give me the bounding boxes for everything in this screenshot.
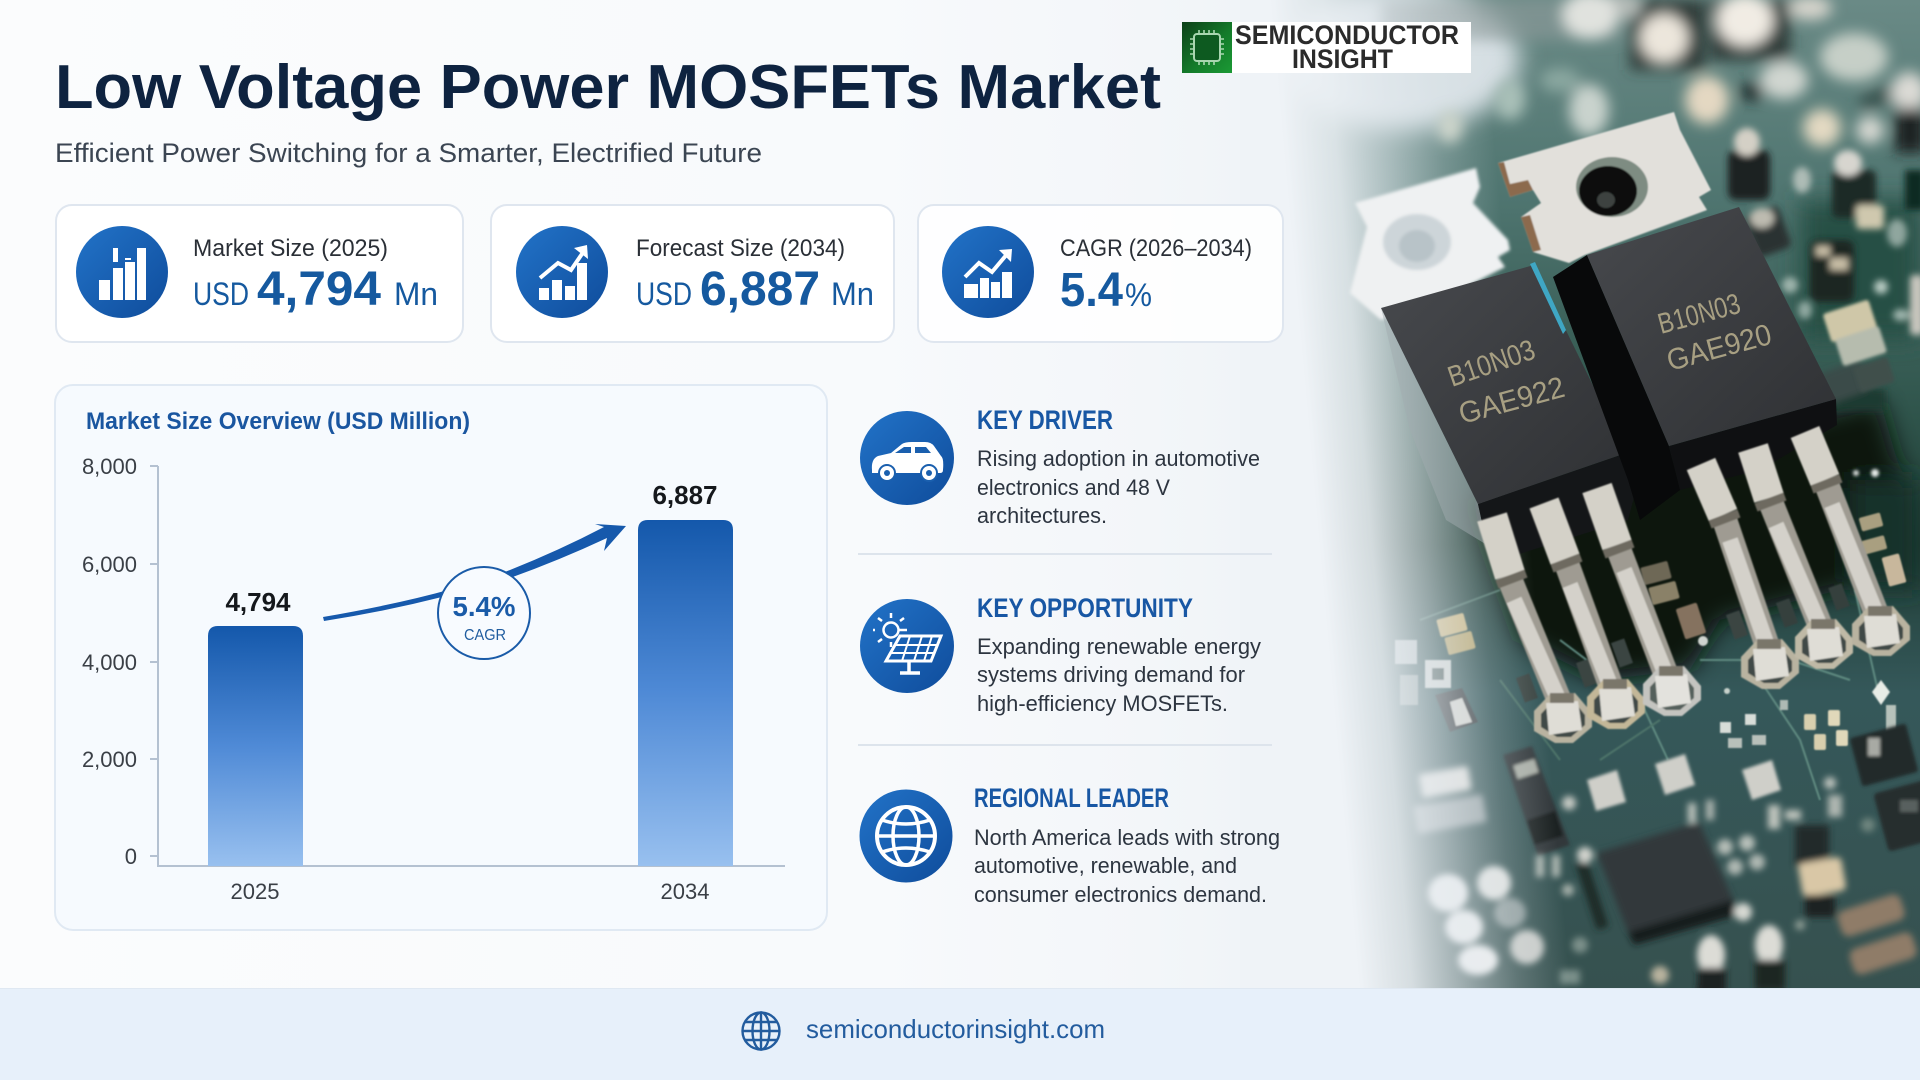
footer bar <box>0 988 1920 1080</box>
left body top face <box>1381 265 1626 504</box>
y axis labels: 4,000 <box>82 650 137 675</box>
description: consumer electronics demand. <box>974 882 1267 907</box>
description: systems driving demand for <box>977 662 1245 687</box>
cyan edge highlight <box>1530 262 1566 334</box>
callout: CAGR badge <box>438 567 530 659</box>
right body marking: B10N03 <box>1655 288 1744 341</box>
value: Mn <box>831 276 874 312</box>
circuit board base <box>1240 0 1920 990</box>
heading: KEY DRIVER <box>977 405 1113 435</box>
value: USD <box>636 276 692 312</box>
value label 2034: 6,887 <box>652 480 718 510</box>
dark board region under the leads <box>1280 0 1920 680</box>
year label 2025: 2025 <box>231 879 279 904</box>
value <box>636 263 874 316</box>
icon: solar panel <box>860 599 954 693</box>
description <box>977 634 1262 716</box>
label: Forecast Size (2034) <box>636 235 845 262</box>
beige capacitor stack, right of packages <box>1823 299 1895 477</box>
description <box>977 446 1260 528</box>
panel: market size overview chart <box>55 385 827 930</box>
MOSFET leads and solder pads <box>1492 432 1910 743</box>
callout: CAGR badge: 5.4% <box>452 591 516 622</box>
panel: CAGR card <box>918 205 1283 342</box>
mid-focus components, upper board <box>1728 128 1920 410</box>
logo wordmark line 1: SEMICONDUCTOR <box>1235 20 1459 50</box>
panel: forecast size card <box>491 205 894 342</box>
y axis labels: 0 <box>125 844 137 869</box>
bar 2034 <box>638 520 733 866</box>
MOSFET package: left <box>1350 168 1636 560</box>
heading: KEY OPPORTUNITY <box>977 593 1193 623</box>
out-of-focus components, bottom of board <box>1413 766 1919 995</box>
icon: car <box>860 411 954 505</box>
logo: Semiconductor Insight <box>1182 20 1471 74</box>
y axis labels: 8,000 <box>82 454 137 479</box>
arrow: growth trend <box>323 524 626 621</box>
left body front and shadow <box>1381 308 1487 545</box>
panel: market size card <box>56 205 463 342</box>
left body marking 2: GAE922 <box>1455 371 1568 431</box>
value: 5.4 <box>1060 264 1123 317</box>
title: Low Voltage Power MOSFETs Market <box>55 53 1161 122</box>
panel: regional leader <box>860 783 1280 907</box>
description: high-efficiency MOSFETs. <box>977 691 1228 716</box>
chart title: Market Size Overview (USD Million) <box>86 408 470 435</box>
left body marking: B10N03 <box>1444 334 1539 394</box>
right metal tab with mounting hole <box>1498 112 1711 263</box>
value: USD <box>193 276 249 312</box>
value <box>193 263 438 316</box>
y axis labels: 2,000 <box>82 747 137 772</box>
panel: key opportunity <box>860 593 1262 716</box>
value label 2025: 4,794 <box>225 587 291 617</box>
sharp board components and traces <box>1395 512 1907 800</box>
right body front <box>1669 399 1837 470</box>
value: Mn <box>394 276 438 312</box>
value: 6,887 <box>700 263 820 316</box>
description: architectures. <box>977 503 1107 528</box>
panel: key driver <box>860 405 1260 528</box>
icon: globe <box>860 790 952 882</box>
left metal tab <box>1350 168 1510 320</box>
description: North America leads with strong <box>974 825 1280 850</box>
white fade into the page background <box>1240 0 1560 988</box>
right body black side <box>1553 255 1680 520</box>
right body top face <box>1587 207 1836 446</box>
out-of-focus components, top of board <box>1380 0 1920 153</box>
icon: trend chart <box>516 226 608 318</box>
description: Expanding renewable energy <box>977 634 1262 659</box>
heading: REGIONAL LEADER <box>974 783 1169 813</box>
description: automotive, renewable, and <box>974 853 1237 878</box>
value: 4,794 <box>257 263 381 316</box>
website url: semiconductorinsight.com <box>806 1014 1105 1044</box>
icon: globe <box>742 1012 780 1050</box>
description: electronics and 48 V <box>977 475 1170 500</box>
bar 2025 <box>208 626 303 866</box>
MOSFET package: right <box>1498 112 1837 520</box>
y axis labels: 6,000 <box>82 552 137 577</box>
description <box>974 825 1280 907</box>
logo wordmark line 2: INSIGHT <box>1292 44 1393 74</box>
soft-focus components, lower board <box>1503 723 1920 856</box>
icon: trend chart <box>942 226 1034 318</box>
subtitle: Efficient Power Switching for a Smarter, Electrified Future <box>55 138 762 168</box>
photo: circuit board with two MOSFET packages <box>1240 0 1920 995</box>
label: CAGR (2026–2034) <box>1060 235 1252 262</box>
right body marking 2: GAE920 <box>1663 318 1775 378</box>
year label 2034: 2034 <box>661 879 709 904</box>
icon: bar chart <box>76 226 168 318</box>
label: Market Size (2025) <box>193 235 388 262</box>
value: % <box>1125 277 1152 313</box>
logo chip icon <box>1182 22 1232 73</box>
y axis labels <box>82 454 137 869</box>
callout: CAGR badge: CAGR <box>464 627 506 644</box>
description: Rising adoption in automotive <box>977 446 1260 471</box>
